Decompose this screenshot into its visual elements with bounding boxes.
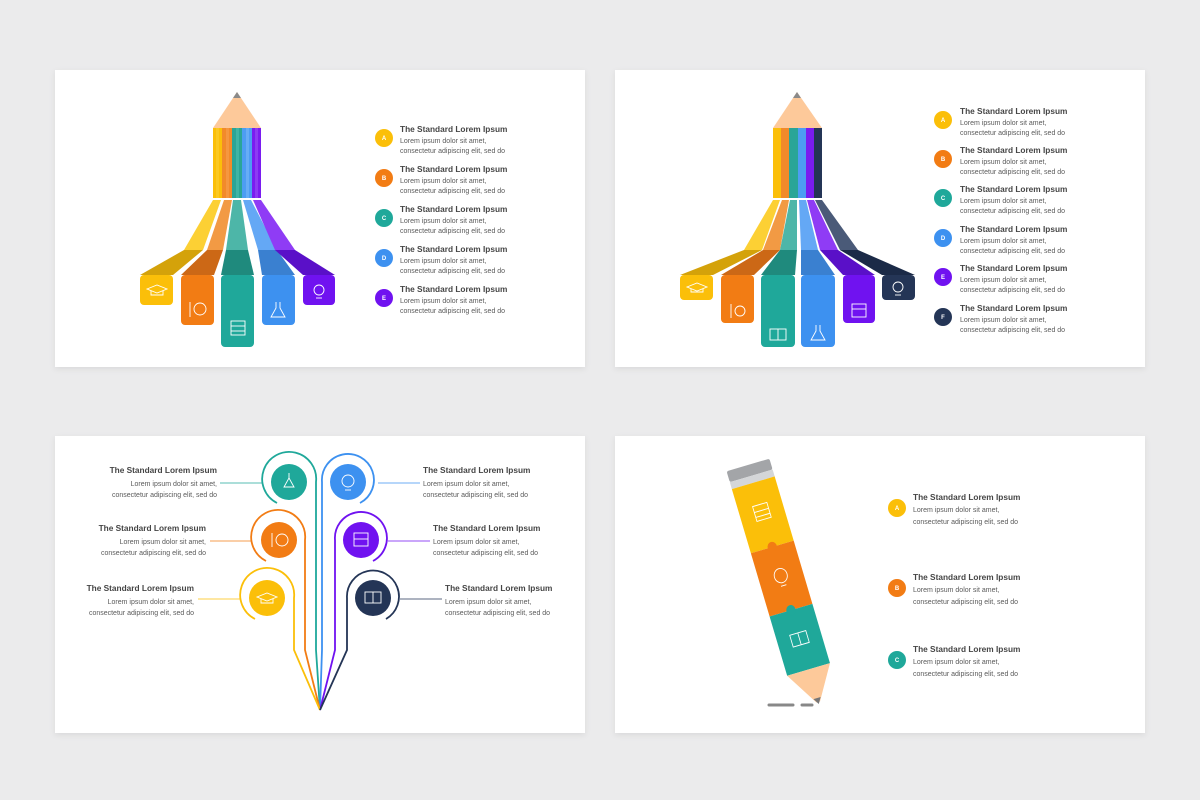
right text blocks: The Standard Lorem Ipsum: [433, 523, 540, 533]
list A-C: Lorem ipsum dolor sit amet,: [913, 587, 999, 594]
icon: palette: [190, 302, 206, 317]
list A-F: C: [941, 196, 946, 202]
list A-F: [934, 106, 1067, 334]
ribbon D blue: [799, 200, 835, 347]
left text blocks: consectetur adipiscing elit, sed do: [89, 610, 194, 617]
left text blocks: consectetur adipiscing elit, sed do: [112, 492, 217, 499]
left text blocks: Lorem ipsum dolor sit amet,: [131, 481, 217, 488]
icon: flask: [811, 325, 825, 340]
left text blocks: The Standard Lorem Ipsum: [99, 523, 206, 533]
ribbon E purple: [807, 200, 875, 323]
left text blocks: The Standard Lorem Ipsum: [87, 583, 194, 593]
list A-F: B: [941, 157, 946, 163]
list A-E: The Standard Lorem Ipsum: [400, 284, 507, 294]
ribbon B orange: [181, 200, 232, 325]
list A-C: B: [895, 586, 900, 592]
icon: abacus: [231, 321, 245, 335]
list A-C: consectetur adipiscing elit, sed do: [913, 519, 1018, 526]
list A-C: consectetur adipiscing elit, sed do: [913, 599, 1018, 606]
list A-E: B: [382, 176, 387, 182]
list A-E: E: [382, 296, 386, 302]
left text blocks: Lorem ipsum dolor sit amet,: [120, 539, 206, 546]
list A-F: The Standard Lorem Ipsum: [960, 145, 1067, 155]
list A-F: consectetur adipiscing elit, sed do: [960, 327, 1065, 334]
tilted pencil: [727, 459, 840, 710]
list A-E: consectetur adipiscing elit, sed do: [400, 308, 505, 315]
list A-C: The Standard Lorem Ipsum: [913, 572, 1020, 582]
list A-E: consectetur adipiscing elit, sed do: [400, 268, 505, 275]
list A-F: A: [941, 118, 946, 124]
list A-F: Lorem ipsum dolor sit amet,: [960, 277, 1046, 284]
list A-E: [375, 124, 507, 315]
icon: graduation cap: [687, 283, 707, 292]
list A-F: The Standard Lorem Ipsum: [960, 184, 1067, 194]
icon: abacus: [852, 304, 866, 317]
list A-C: C: [895, 658, 900, 664]
icon: globe: [893, 282, 903, 295]
list A-F: E: [941, 275, 945, 281]
left text blocks: consectetur adipiscing elit, sed do: [101, 550, 206, 557]
pencil tip: [773, 92, 822, 128]
pencil body stripes: [773, 128, 822, 198]
list A-C: [888, 492, 1020, 678]
panel: tilted pencil: [615, 436, 1145, 733]
ribbon C teal: [221, 200, 254, 347]
list A-E: D: [382, 256, 387, 262]
ribbon A yellow: [680, 200, 780, 300]
list A-E: C: [382, 216, 387, 222]
right text blocks: [423, 465, 552, 617]
list A-F: consectetur adipiscing elit, sed do: [960, 287, 1065, 294]
icon: palette: [731, 304, 745, 318]
list A-C: The Standard Lorem Ipsum: [913, 492, 1020, 502]
list A-F: Lorem ipsum dolor sit amet,: [960, 159, 1046, 166]
list A-F: D: [941, 236, 946, 242]
ribbon B orange: [721, 200, 789, 323]
right text blocks: The Standard Lorem Ipsum: [423, 465, 530, 475]
list A-F: Lorem ipsum dolor sit amet,: [960, 198, 1046, 205]
list A-F: consectetur adipiscing elit, sed do: [960, 208, 1065, 215]
list A-F: F: [941, 315, 945, 321]
list A-C: Lorem ipsum dolor sit amet,: [913, 507, 999, 514]
list A-F: consectetur adipiscing elit, sed do: [960, 248, 1065, 255]
list A-C: The Standard Lorem Ipsum: [913, 644, 1020, 654]
list A-F: The Standard Lorem Ipsum: [960, 106, 1067, 116]
list A-F: consectetur adipiscing elit, sed do: [960, 169, 1065, 176]
right text blocks: Lorem ipsum dolor sit amet,: [433, 539, 519, 546]
list A-E: The Standard Lorem Ipsum: [400, 124, 507, 134]
list A-E: A: [382, 136, 387, 142]
panel: pencil six ribbons: [615, 70, 1145, 367]
left text blocks: The Standard Lorem Ipsum: [110, 465, 217, 475]
pencil body stripes: [213, 128, 261, 198]
list A-C: A: [895, 506, 900, 512]
icon: graduation cap: [147, 285, 167, 295]
right text blocks: consectetur adipiscing elit, sed do: [433, 550, 538, 557]
list A-E: Lorem ipsum dolor sit amet,: [400, 298, 486, 305]
list A-E: consectetur adipiscing elit, sed do: [400, 188, 505, 195]
list A-C: Lorem ipsum dolor sit amet,: [913, 659, 999, 666]
dash lines under pencil: [769, 704, 812, 706]
panel: pen-nib line tree: [55, 436, 585, 733]
list A-F: consectetur adipiscing elit, sed do: [960, 130, 1065, 137]
list A-F: Lorem ipsum dolor sit amet,: [960, 317, 1046, 324]
list A-F: Lorem ipsum dolor sit amet,: [960, 238, 1046, 245]
list A-F: The Standard Lorem Ipsum: [960, 263, 1067, 273]
ribbon C teal: [761, 200, 797, 347]
list A-E: Lorem ipsum dolor sit amet,: [400, 258, 486, 265]
icon: book: [770, 329, 786, 340]
icon: globe: [314, 285, 324, 298]
pencil tip: [213, 92, 261, 128]
left text blocks: Lorem ipsum dolor sit amet,: [108, 599, 194, 606]
list A-C: consectetur adipiscing elit, sed do: [913, 671, 1018, 678]
list A-F: The Standard Lorem Ipsum: [960, 303, 1067, 313]
connectors: [198, 483, 442, 599]
list A-E: Lorem ipsum dolor sit amet,: [400, 218, 486, 225]
right text blocks: Lorem ipsum dolor sit amet,: [423, 481, 509, 488]
list A-F: Lorem ipsum dolor sit amet,: [960, 120, 1046, 127]
right text blocks: The Standard Lorem Ipsum: [445, 583, 552, 593]
list A-E: The Standard Lorem Ipsum: [400, 204, 507, 214]
list A-E: Lorem ipsum dolor sit amet,: [400, 178, 486, 185]
right text blocks: consectetur adipiscing elit, sed do: [423, 492, 528, 499]
panel: pencil five ribbons: [55, 70, 585, 367]
ribbon A yellow: [140, 200, 221, 305]
list A-E: The Standard Lorem Ipsum: [400, 244, 507, 254]
left text blocks: [87, 465, 217, 617]
list A-F: The Standard Lorem Ipsum: [960, 224, 1067, 234]
list A-E: Lorem ipsum dolor sit amet,: [400, 138, 486, 145]
icon: flask: [271, 302, 285, 317]
list A-E: consectetur adipiscing elit, sed do: [400, 148, 505, 155]
ribbon E purple: [253, 200, 335, 305]
ribbon F navy: [815, 200, 915, 300]
node circles: [249, 464, 391, 616]
list A-E: consectetur adipiscing elit, sed do: [400, 228, 505, 235]
right text blocks: consectetur adipiscing elit, sed do: [445, 610, 550, 617]
right text blocks: Lorem ipsum dolor sit amet,: [445, 599, 531, 606]
list A-E: The Standard Lorem Ipsum: [400, 164, 507, 174]
lines converging: [240, 452, 399, 710]
ribbon D blue: [243, 200, 295, 325]
